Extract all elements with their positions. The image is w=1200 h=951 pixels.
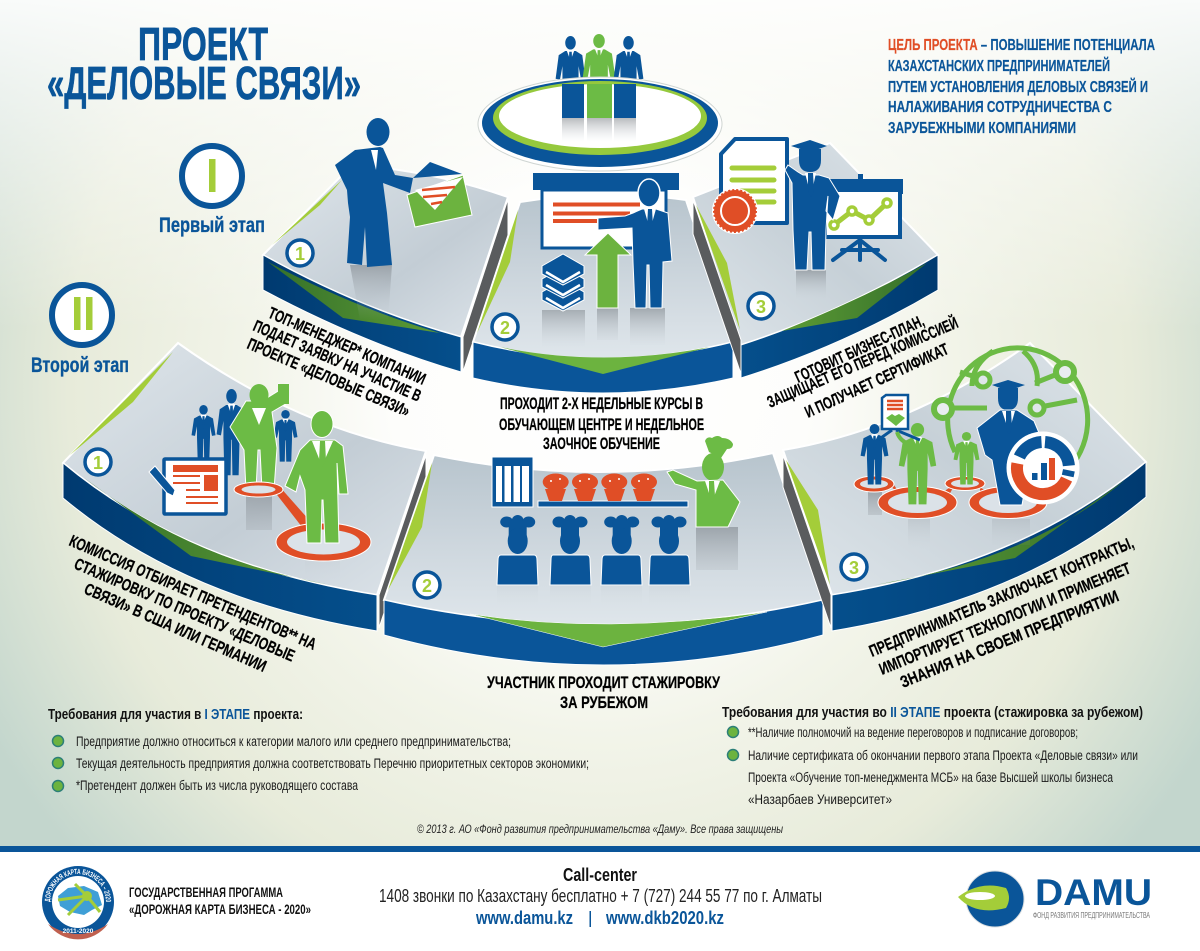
number 2: 2: [422, 576, 432, 596]
program name: [129, 885, 311, 917]
requirements: stage II: **Наличие полномочий на ведение переговоров и подписание договоров;: [748, 725, 1078, 740]
document and pen: [149, 459, 226, 514]
number 1: [85, 449, 111, 475]
number 1: 1: [93, 453, 103, 473]
man with envelope: [335, 118, 472, 267]
presenter: [598, 179, 672, 308]
reflection: [796, 270, 826, 300]
requirements: stage I: Предприятие должно относиться к категории малого или среднего предпринимательства;: [76, 734, 511, 749]
caption: stage II step 2: УЧАСТНИК ПРОХОДИТ СТАЖИРОВКУ: [487, 674, 721, 692]
panel: stage I step 2: [473, 173, 733, 393]
logo: DAMU: DAMU: [1035, 872, 1152, 913]
caption: stage I step 1: ПРОЕКТЕ «ДЕЛОВЫЕ СВЯЗИ»: [244, 335, 412, 421]
globe: [934, 348, 1088, 472]
requirements: stage I: Требования для участия в I ЭТАПЕ проекта:: [48, 707, 303, 723]
reflection: [350, 265, 392, 320]
caption: stage I step 3: [764, 312, 961, 422]
caption: stage II step 3: [867, 534, 1136, 692]
caption: stage II step 2: ЗА РУБЕЖОМ: [560, 694, 648, 712]
panel: stage II step 2: [384, 436, 823, 665]
donut chart: [1006, 432, 1080, 504]
stage II badge: Второй этап: [31, 354, 129, 377]
caption: stage I step 1: [244, 304, 428, 421]
title: [47, 18, 361, 109]
caption: stage II step 3: ЗНАНИЯ НА СВОЕМ ПРЕДПРИЯТИИ: [898, 587, 1121, 692]
project goal text: КАЗАХСТАНСКИХ ПРЕДПРИНИМАТЕЛЕЙ: [888, 57, 1110, 75]
selected candidate: [285, 410, 348, 543]
logo: business road map: 2011-2020: [63, 928, 94, 935]
connected rings: [854, 476, 1047, 518]
podium with three people: [478, 34, 722, 171]
logo: business road map: ДОРОЖНАЯ КАРТА БИЗНЕСА – 2020: [44, 868, 112, 902]
project goal text: [888, 37, 1155, 137]
book stack: [542, 254, 584, 311]
caption: stage II step 2: [487, 674, 721, 712]
caption: stage I step 3: ГОТОВИТ БИЗНЕС-ПЛАН,: [792, 312, 927, 387]
panel: stage II step 3: [783, 343, 1146, 631]
call center contacts: www.dkb2020.kz: [605, 908, 724, 928]
program name: «ДОРОЖНАЯ КАРТА БИЗНЕСА - 2020»: [129, 902, 311, 917]
number 3: 3: [849, 558, 859, 578]
caption: stage I step 2: ЗАОЧНОЕ ОБУЧЕНИЕ: [543, 435, 660, 453]
requirements: stage II: «Назарбаев Университет»: [748, 792, 892, 807]
number 3: [841, 554, 867, 580]
growth arrow: [585, 233, 631, 308]
number 2: [492, 314, 518, 340]
title: ПРОЕКТ: [138, 18, 268, 70]
logo: DAMU: [958, 871, 1152, 927]
group of candidates: [192, 383, 298, 490]
reflections: [542, 308, 665, 348]
bookshelf: [492, 457, 533, 507]
caption: stage I step 1: ПОДАЕТ ЗАЯВКУ НА УЧАСТИЕ В: [250, 317, 424, 406]
requirements: stage I: Текущая деятельность предприятия должна соответствовать Перечню приоритетных секторов экономики;: [76, 756, 589, 771]
caption: stage I step 2: [499, 395, 704, 453]
number 1: [287, 240, 313, 266]
reflections: [868, 492, 1030, 550]
document with seal: [712, 139, 787, 234]
panel: stage I step 1: [263, 118, 508, 372]
caption: stage II step 1: [66, 532, 319, 676]
title: «ДЕЛОВЫЕ СВЯЗИ»: [47, 57, 361, 109]
connected rings: [234, 482, 371, 561]
caption: stage I step 1: ТОП-МЕНЕДЖЕР* КОМПАНИИ: [265, 304, 428, 389]
project goal text: НАЛАЖИВАНИЯ СОТРУДНИЧЕСТВА С: [888, 99, 1112, 116]
contract document: [882, 395, 908, 429]
requirements: stage II: [722, 705, 1143, 807]
students: [497, 515, 690, 585]
handshake scene people: [861, 423, 979, 504]
stage I badge: Первый этап: [159, 214, 265, 237]
requirements: stage I: [48, 707, 589, 793]
muffins on shelf: [538, 474, 688, 507]
requirements: stage I: *Претендент должен быть из числа руководящего состава: [76, 778, 358, 793]
graduate man: [785, 140, 840, 270]
caption: stage I step 2: ОБУЧАЮЩЕМ ЦЕНТРЕ И НЕДЕЛЬНОЕ: [499, 416, 704, 434]
number 2: 2: [500, 318, 510, 338]
number 1: 1: [295, 244, 305, 264]
panel: stage II step 1: [63, 343, 426, 631]
requirements: stage II: Требования для участия во II ЭТАПЕ проекта (стажировка за рубежом): [722, 705, 1143, 721]
program name: ГОСУДАРСТВЕННАЯ ПРОГАММА: [129, 885, 283, 900]
caption: stage I step 3: ЗАЩИЩАЕТ ЕГО ПЕРЕД КОМИССИЕЙ: [764, 313, 961, 412]
copyright: © 2013 г. АО «Фонд развития предпринимательства «Даму». Все права защищены: [417, 824, 783, 836]
reflections: [497, 527, 738, 605]
presentation board: [533, 173, 679, 248]
easel with chart: [825, 174, 903, 260]
call center contacts: www.damu.kz: [475, 908, 573, 928]
stage II badge: [31, 285, 129, 377]
graduate man: [977, 380, 1042, 505]
call center contacts: Call-center: [563, 865, 637, 885]
project goal text: ЗАРУБЕЖНЫМИ КОМПАНИЯМИ: [888, 120, 1076, 137]
call center contacts: [379, 865, 822, 928]
panel: stage I step 3: [693, 139, 938, 378]
reflections: [246, 491, 340, 580]
caption: stage I step 2: ПРОХОДИТ 2-Х НЕДЕЛЬНЫЕ КУРСЫ В: [500, 395, 703, 413]
number 3: [748, 293, 774, 319]
number 3: 3: [756, 297, 766, 317]
caption: stage I step 3: И ПОЛУЧАЕТ СЕРТИФИКАТ: [802, 340, 952, 422]
caption: stage II step 1: КОМИССИЯ ОТБИРАЕТ ПРЕТЕНДЕНТОВ** НА: [66, 532, 319, 654]
chef: [667, 436, 740, 527]
call center contacts: 1408 звонки по Казахстану бесплатно + 7 (727) 244 55 77 по г. Алматы: [379, 886, 822, 906]
caption: stage II step 1: СВЯЗИ» В США ИЛИ ГЕРМАНИИ: [81, 580, 269, 676]
stage I badge: [159, 146, 265, 237]
logo: business road map: [42, 866, 114, 940]
caption: stage II step 1: СТАЖИРОВКУ ПО ПРОЕКТУ «ДЕЛОВЫЕ: [71, 555, 297, 665]
number 2: [414, 572, 440, 598]
